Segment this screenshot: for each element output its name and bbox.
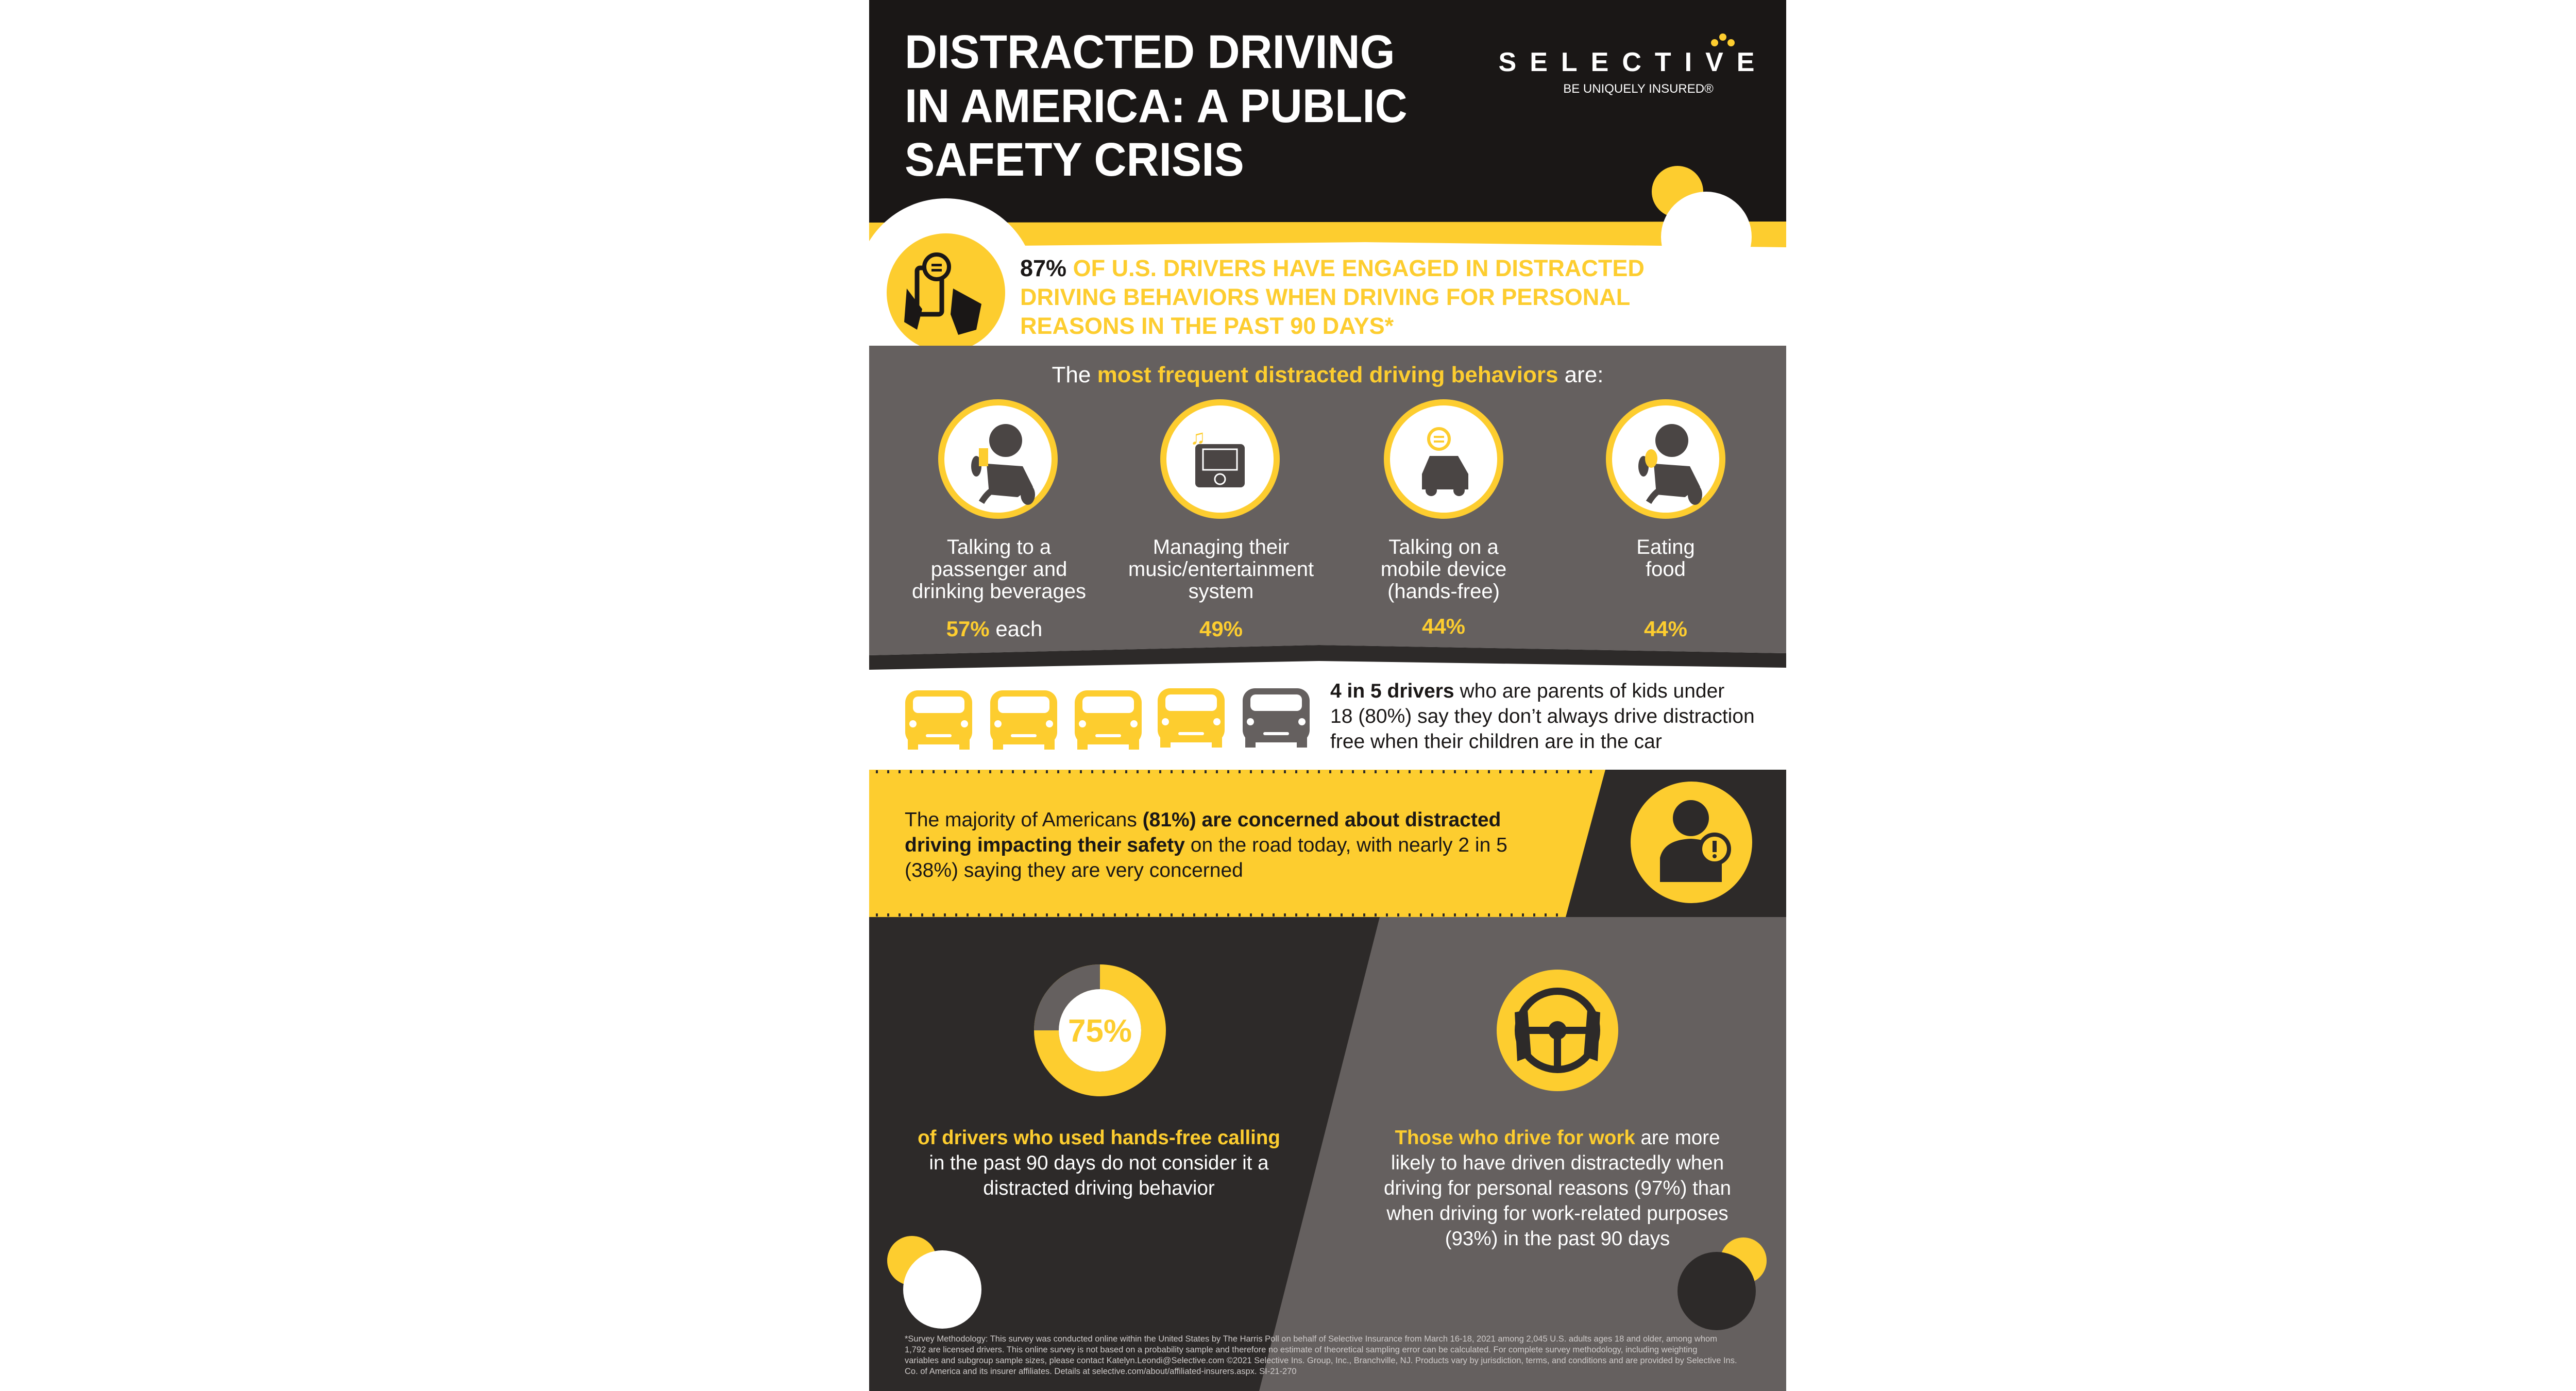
decorative circles top right — [1652, 166, 1752, 282]
footnote: variables and subgroup sample sizes, please contact Katelyn.Leondi@Selective.com ©2021 Selective Ins. Group, Inc., Branchville, NJ. Products vary by jurisdiction, terms, and conditions and are provided by Selective Ins. — [905, 1356, 1737, 1365]
hands-free text: of drivers who used hands-free calling — [918, 1127, 1280, 1149]
behavior labels: Eating — [1636, 536, 1695, 558]
white stat section — [869, 247, 1786, 346]
panel: frequent behaviors — [869, 346, 1786, 670]
heading: The most frequent distracted driving behaviors are: — [1052, 362, 1603, 387]
icon: music system — [1163, 402, 1277, 516]
work driving text — [1384, 1127, 1731, 1250]
icon: eating food — [1609, 402, 1722, 516]
percentages — [946, 614, 1687, 641]
panel: concern band — [869, 770, 1786, 917]
footnote: *Survey Methodology: This survey was conducted online within the United States by The Harris Poll on behalf of Selective Insurance from March 16-18, 2021 among 2,045 U.S. adults ages 18 and older, among whom — [905, 1334, 1717, 1344]
87% stat text — [1020, 255, 1645, 339]
behavior labels: passenger and — [931, 558, 1067, 581]
title: SAFETY CRISIS — [905, 133, 1244, 186]
donut chart 75% — [1034, 964, 1154, 1084]
behavior labels: mobile device — [1381, 558, 1506, 581]
behavior labels: system — [1189, 580, 1253, 603]
behavior labels: food — [1646, 558, 1686, 581]
percentages: 44% — [1422, 614, 1465, 638]
icon: phone in hands — [856, 198, 1036, 379]
parents stat text: free when their children are in the car — [1330, 731, 1662, 753]
behavior labels: Managing their — [1153, 536, 1289, 558]
title: DISTRACTED DRIVING — [905, 26, 1395, 79]
percentages: 57% each — [946, 617, 1042, 641]
behavior labels: (hands-free) — [1387, 580, 1500, 603]
logo: SELECTIVE — [1499, 47, 1768, 77]
work driving text: Those who drive for work are more — [1395, 1127, 1720, 1149]
concern text: (38%) saying they are very concerned — [905, 859, 1243, 881]
work driving text: when driving for work-related purposes — [1386, 1202, 1728, 1225]
concern text: The majority of Americans (81%) are concerned about distracted — [905, 809, 1501, 831]
behavior labels: music/entertainment — [1128, 558, 1314, 581]
footnote — [905, 1334, 1737, 1376]
logo — [1499, 33, 1768, 96]
concern text — [905, 809, 1507, 881]
87% stat text: REASONS IN THE PAST 90 DAYS* — [1020, 313, 1394, 339]
behavior labels — [912, 536, 1695, 603]
87% stat text: 87% OF U.S. DRIVERS HAVE ENGAGED IN DISTRACTED — [1020, 255, 1645, 281]
parents stat text: 18 (80%) say they don’t always drive distraction — [1330, 705, 1755, 727]
icon: car with speech bubble — [1387, 402, 1500, 516]
87% stat text: DRIVING BEHAVIORS WHEN DRIVING FOR PERSONAL — [1020, 284, 1630, 310]
decorative bottom circles — [887, 1236, 1767, 1330]
logo: BE UNIQUELY INSURED® — [1563, 82, 1714, 96]
percentages: 44% — [1644, 617, 1687, 641]
parents stat text — [1330, 680, 1755, 753]
work driving text: driving for personal reasons (97%) than — [1384, 1177, 1731, 1199]
hands-free text — [918, 1127, 1280, 1199]
behavior labels: Talking to a — [947, 536, 1052, 558]
footnote: 1,792 are licensed drivers. This online survey is not based on a probability sample and therefore no estimate of theoretical sampling error can be calculated. For complete survey methodology, including weighting — [905, 1345, 1697, 1354]
icon: steering wheel — [1497, 970, 1618, 1091]
behavior labels: Talking on a — [1388, 536, 1499, 558]
cars row — [905, 688, 1310, 750]
parents stat text: 4 in 5 drivers who are parents of kids under — [1330, 680, 1724, 702]
percentages: 49% — [1199, 617, 1243, 641]
concern text: driving impacting their safety on the road today, with nearly 2 in 5 — [905, 834, 1507, 856]
work driving text: (93%) in the past 90 days — [1445, 1228, 1670, 1250]
header: black background — [869, 0, 1786, 247]
icon: person with alert — [1631, 782, 1752, 903]
donut chart 75%: 75% — [1068, 1013, 1132, 1049]
hands-free text: in the past 90 days do not consider it a — [929, 1152, 1269, 1174]
hands-free text: distracted driving behavior — [983, 1177, 1215, 1199]
behavior labels: drinking beverages — [912, 580, 1086, 603]
footnote: Co. of America and its insurer affiliates. Details at selective.com/about/affiliated-insurers.aspx. SI-21-270 — [905, 1367, 1297, 1376]
icon: passenger and beverage — [941, 402, 1055, 516]
title: IN AMERICA: A PUBLIC — [905, 80, 1408, 133]
panel: bottom split — [869, 917, 1786, 1391]
work driving text: likely to have driven distractedly when — [1391, 1152, 1724, 1174]
title — [905, 26, 1408, 186]
icon: music system: ♫ — [1190, 426, 1206, 449]
